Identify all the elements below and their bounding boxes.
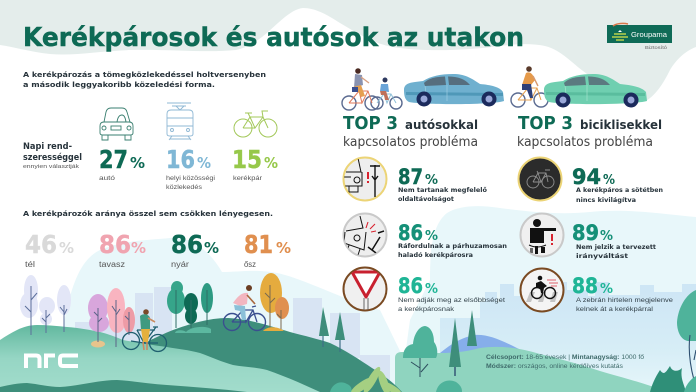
stat: spring 86% [99, 230, 146, 269]
stat: 86% right turn [398, 221, 507, 259]
logo: nrc [26, 356, 78, 368]
heading: TOP 3 with cyclists: biciklisekkel [580, 117, 662, 132]
background: pale sky shapes [60, 206, 696, 392]
stat: public transport 16%: helyi közösségi [166, 176, 215, 182]
stat: 86% right turn: Ráfordulnak a párhuzamosan [398, 242, 507, 250]
stat: auto 27%: autó [99, 176, 116, 182]
stat: 86% right of way: Nem adják meg az elsőbbséget [398, 297, 505, 304]
trees: lower centre and cypress [319, 307, 477, 377]
intro text: a második leggyakoribb közeledési forma. [23, 80, 215, 89]
stat: 94% unlit [572, 165, 663, 204]
methodology note: Módszer: országos, online kérdőíves kutatás [486, 363, 623, 370]
stat: 94% unlit: 94 [572, 165, 601, 189]
stat: 86% right of way: a kerékpárosnak [398, 306, 455, 313]
stat: winter 46%: 46 [25, 230, 57, 259]
stat: public transport 16%: közlekedés [166, 185, 202, 191]
stat: winter 46%: % [59, 239, 74, 257]
stat: summer 86% [171, 230, 219, 269]
background: city skyline [440, 282, 696, 392]
stat: public transport 16%: 16 [166, 145, 195, 174]
heading: TOP 3 with cyclists: TOP 3 [518, 114, 573, 134]
trees: summer [167, 281, 213, 333]
stat: 86% right turn: 86 [398, 221, 423, 245]
stat: 89% no signal: % [600, 229, 613, 244]
tree and fern: lower right [650, 290, 696, 392]
trees: spring [88, 288, 135, 348]
background: left green hill [0, 325, 320, 392]
stat: 86% right of way: 86 [398, 274, 423, 298]
logo: Groupama: Groupama [631, 30, 668, 39]
cyclist: riding, pink shirt [224, 285, 266, 330]
icon: give way sign [344, 268, 386, 312]
stat: winter 46% [25, 230, 74, 269]
stat: public transport 16% [166, 145, 215, 191]
stat: 87% side distance [398, 165, 488, 203]
stat: 87% side distance: oldaltávolságot [398, 195, 454, 203]
trees: autumn [260, 273, 289, 331]
icon: hand signal [520, 214, 564, 256]
stat: 87% side distance: Nem tartanak megfelelő [398, 185, 488, 194]
stat: 87% side distance: 87 [398, 165, 423, 189]
icon: unlit bicycle [518, 158, 562, 200]
stat: spring 86%: 86 [99, 230, 131, 259]
stat: 88% zebra crossing: % [600, 282, 613, 297]
stat: summer 86%: % [204, 239, 219, 257]
illustration: blue car [404, 74, 504, 106]
stat: 94% unlit: A kerékpáros a sötétben [576, 186, 663, 194]
daily use label: ennyien választják [23, 164, 79, 170]
icon: bicycle [234, 111, 277, 137]
illustration: green car [544, 74, 647, 108]
logo: Groupama: Biztosító [645, 45, 668, 50]
stat: 86% right turn: % [425, 229, 438, 244]
icon: zebra crossing cyclist [520, 268, 564, 312]
trees: winter [20, 275, 71, 335]
stat: 88% zebra crossing: 88 [572, 274, 598, 298]
plants: lower left [330, 365, 462, 392]
heading: TOP 3 with cyclists: kapcsolatos probléma [517, 135, 653, 150]
heading: TOP 3 with drivers: TOP 3 [343, 114, 398, 134]
stat: 86% right turn: haladó kerékpárosra [398, 251, 473, 259]
stat: 94% unlit: % [603, 173, 615, 188]
background: blue hill [430, 335, 525, 375]
stat: autumn 81%: 81 [244, 230, 273, 259]
seasons heading: A kerékpározók aránya összel sem csökken lényegesen. [23, 209, 273, 218]
stat: spring 86%: % [131, 239, 146, 257]
cyclist: walking with bike [122, 309, 166, 352]
stat: public transport 16%: % [197, 154, 211, 172]
stat: bicycle 15% [232, 145, 278, 182]
title: Kerékpárosok és autósok az utakon [23, 23, 524, 53]
background: left buildings [75, 287, 390, 385]
stat: 88% zebra crossing: A zebrán hirtelen megjelenve [576, 297, 673, 304]
illustration: cyclists, woman and child [342, 68, 402, 110]
stat: 86% right of way [398, 274, 505, 313]
stat: 88% zebra crossing [572, 274, 673, 313]
stat: bicycle 15%: 15 [232, 145, 262, 174]
stat: auto 27% [99, 145, 145, 182]
intro text [23, 70, 266, 89]
stat: 86% right of way: % [425, 282, 438, 297]
stat: auto 27%: 27 [99, 145, 128, 174]
icon: car [100, 108, 133, 140]
stat: bicycle 15%: % [264, 154, 278, 172]
logo: Groupama [607, 23, 672, 50]
illustration: cyclist man [511, 66, 548, 107]
icon: tram [167, 103, 193, 140]
background: foreground dark band [0, 380, 247, 392]
icon: side distance [343, 158, 386, 200]
stat: auto 27%: % [130, 154, 145, 172]
intro text: A kerékpározás a tömegközlekedéssel holtversenyben [23, 70, 266, 79]
stat: 89% no signal: 89 [572, 221, 599, 245]
heading: TOP 3 with cyclists [517, 114, 662, 150]
heading: TOP 3 with drivers: autósokkal [405, 117, 478, 132]
background: dark hill [140, 318, 402, 392]
stat: summer 86%: nyár [171, 260, 189, 269]
stat: spring 86%: tavasz [99, 260, 125, 269]
stat: 89% no signal: irányváltást [576, 252, 628, 260]
heading: TOP 3 with drivers [343, 114, 478, 150]
stat: autumn 81%: ősz [244, 260, 256, 269]
methodology note: Célcsoport: 18-65 évesek | Mintanagyság: 1000 fő [486, 354, 645, 361]
daily use label [23, 141, 82, 170]
methodology note [486, 354, 645, 370]
stat: bicycle 15%: kerékpár [233, 176, 262, 182]
stat: 87% side distance: % [425, 173, 438, 188]
stat: summer 86%: 86 [171, 230, 203, 259]
background: top grey blob [0, 0, 696, 101]
stat: 88% zebra crossing: kelnek át a kerékpárral [576, 306, 654, 313]
heading: TOP 3 with drivers: kapcsolatos probléma [343, 135, 478, 150]
daily use label: Napi rend- [23, 141, 73, 151]
stat: autumn 81% [244, 230, 291, 269]
background: right mint hill [395, 347, 667, 392]
icon: turning into cyclist [344, 214, 386, 256]
daily use label: szerességgel [23, 152, 82, 162]
stat: winter 46%: tél [25, 260, 35, 269]
stat: autumn 81%: % [276, 239, 291, 257]
stat: 89% no signal [572, 221, 656, 260]
stat: 89% no signal: Nem jelzik a tervezett [576, 243, 656, 251]
stat: 94% unlit: nincs kivilágítva [576, 196, 636, 204]
